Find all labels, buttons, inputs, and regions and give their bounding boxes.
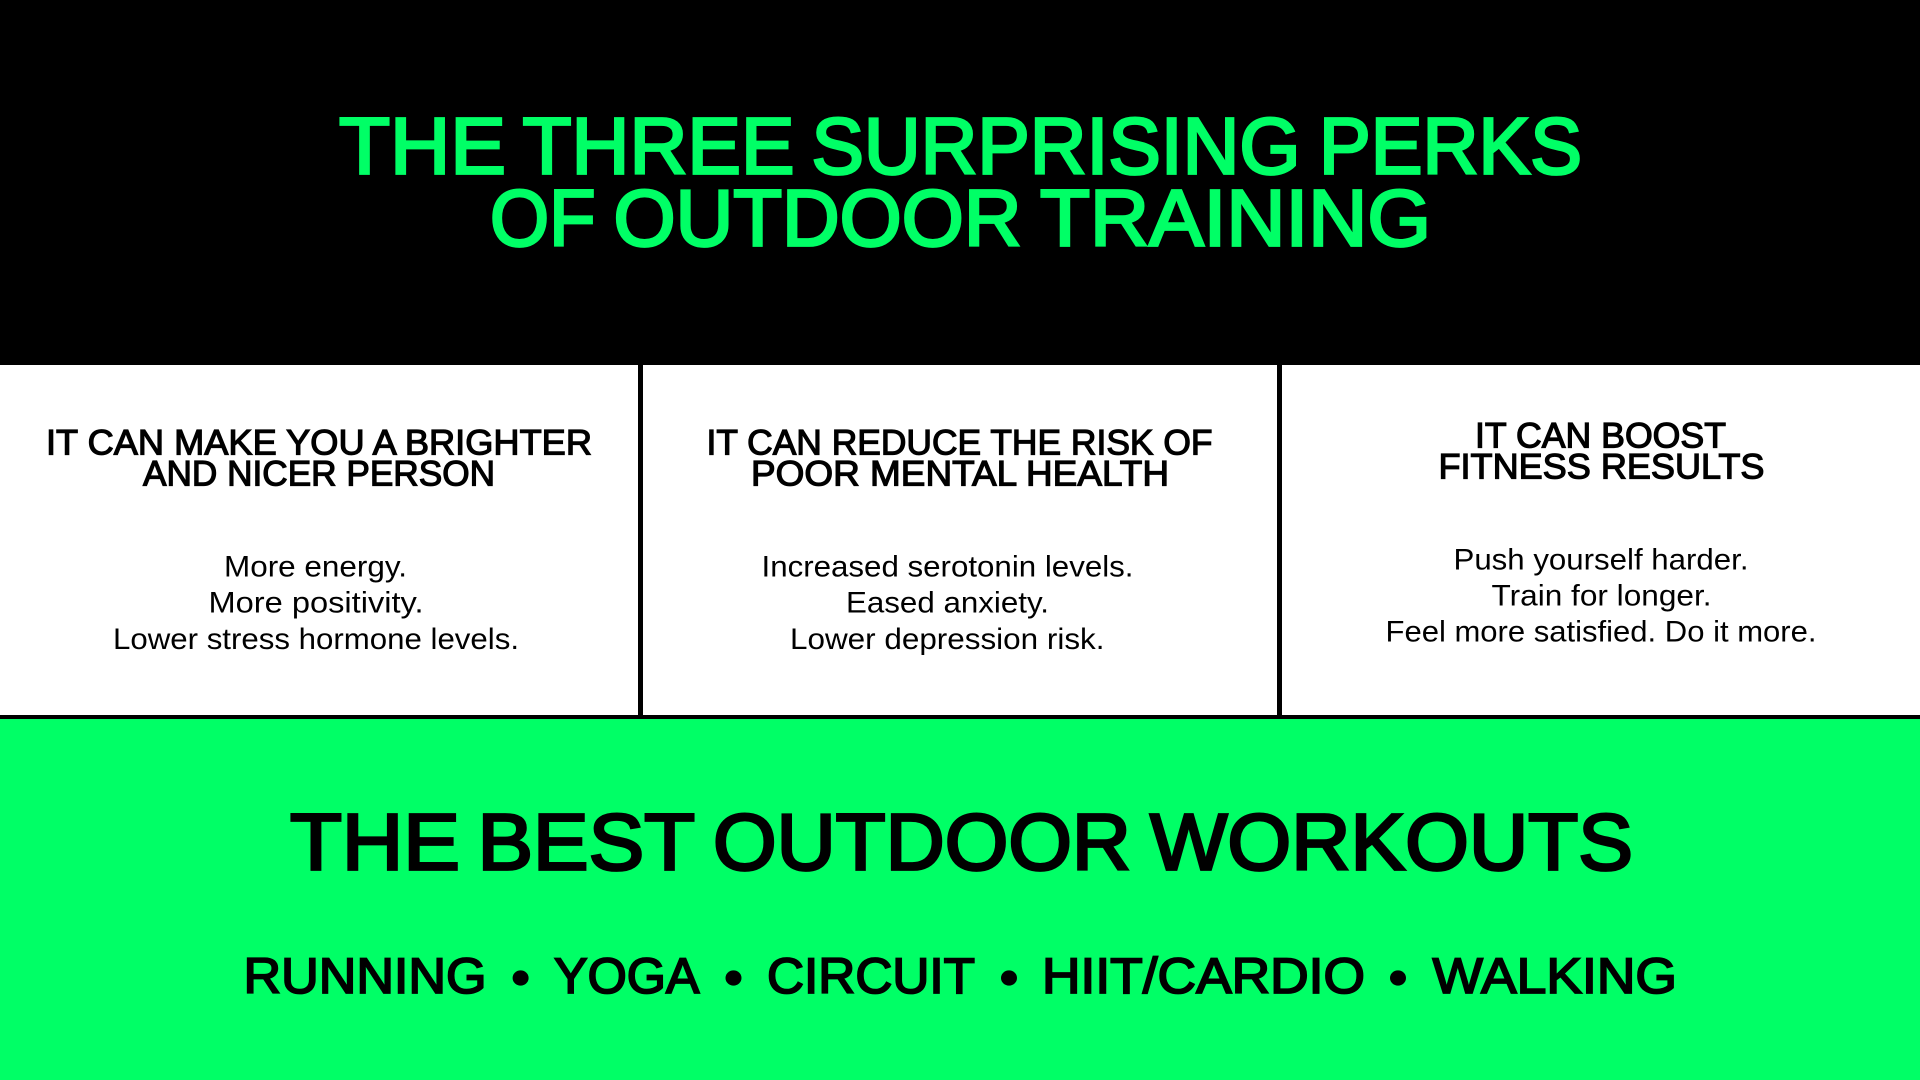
- text block: perk 2 benefits: Eased anxiety.: [846, 587, 1049, 620]
- title: THREE: [522, 102, 794, 191]
- text block: perk 3 benefits: Train for longer.: [1492, 580, 1712, 613]
- text block: perk 3 benefits: Feel more satisfied. Do it more.: [1386, 616, 1816, 649]
- workout list: RUNNING: [244, 948, 486, 1004]
- workout list: YOGA: [554, 948, 700, 1004]
- heading: perk 1: [46, 423, 592, 493]
- title: SURPRISING: [812, 102, 1300, 191]
- workout list: HIIT/CARDIO: [1042, 948, 1365, 1004]
- text block: perk 2 benefits: [762, 551, 1134, 656]
- title: [339, 102, 1582, 262]
- text block: perk 1 benefits: More energy.: [224, 551, 407, 584]
- heading: perk 2: POOR MENTAL HEALTH: [751, 454, 1169, 493]
- heading: perk 2: IT CAN REDUCE THE RISK OF: [706, 423, 1212, 462]
- panel: title header: [0, 0, 1920, 365]
- title: TRAINING: [1040, 173, 1431, 262]
- heading: perk 3: [1438, 416, 1764, 486]
- heading: the best outdoor workouts: BEST: [478, 797, 694, 886]
- heading: perk 1: IT CAN MAKE YOU A BRIGHTER: [46, 423, 592, 462]
- text block: perk 2 benefits: Increased serotonin levels.: [762, 551, 1134, 584]
- panel: perk 2 reduce risk of poor mental health: [643, 365, 1277, 715]
- panel: perk 3 boost fitness results: [1282, 365, 1920, 715]
- heading: the best outdoor workouts: WORKOUTS: [1150, 797, 1633, 886]
- heading: perk 1: AND NICER PERSON: [143, 454, 495, 493]
- workout list: WALKING: [1432, 948, 1677, 1004]
- text block: perk 3 benefits: [1386, 543, 1816, 649]
- text block: perk 1 benefits: More positivity.: [208, 587, 424, 620]
- heading: the best outdoor workouts: OUTDOOR: [713, 797, 1131, 886]
- workout list: CIRCUIT: [767, 948, 975, 1004]
- heading: perk 3: FITNESS RESULTS: [1438, 448, 1764, 486]
- panel: best outdoor workouts: [0, 719, 1920, 1080]
- text block: perk 3 benefits: Push yourself harder.: [1454, 543, 1748, 576]
- text block: perk 1 benefits: Lower stress hormone levels.: [113, 623, 519, 656]
- text block: perk 2 benefits: Lower depression risk.: [790, 623, 1104, 656]
- workout list: [244, 948, 1677, 1004]
- heading: the best outdoor workouts: THE: [290, 797, 460, 886]
- heading: perk 3: IT CAN BOOST: [1475, 416, 1726, 456]
- title: OF: [490, 173, 596, 262]
- text block: perk 1 benefits: [113, 551, 519, 656]
- panel: perk 1 brighter and nicer person: [0, 365, 638, 715]
- title: THE: [339, 102, 506, 191]
- title: OUTDOOR: [614, 173, 1022, 262]
- title: PERKS: [1319, 102, 1582, 191]
- heading: perk 2: [706, 423, 1212, 493]
